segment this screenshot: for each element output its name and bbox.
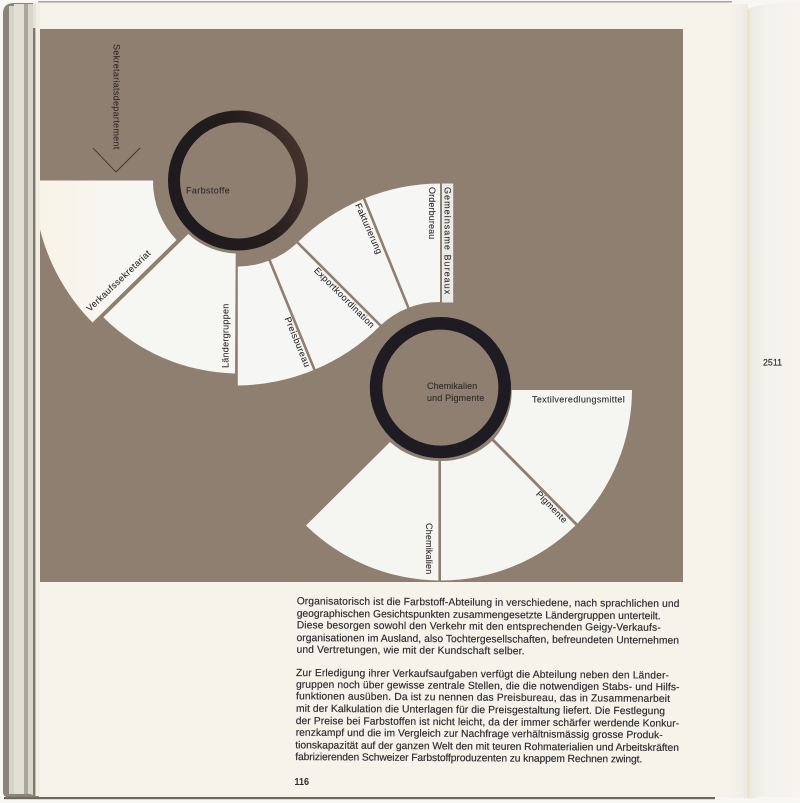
body text: first paragraph: Diese besorgen sowohl den Verkehr mit den entsprechenden Geigy-Verkaufs- (297, 620, 661, 634)
body text: second paragraph: renzkampf und die im Vergleich zur Nachfrage verhältnismässig grosse Produk- (296, 728, 663, 741)
page number: 2511: 2511 (763, 358, 782, 368)
diagram: Chemikalien und Pigmente wedges (306, 390, 632, 580)
body text: second paragraph (295, 668, 680, 765)
wedge group: Preisbureau, Exportkoordination, Fakturierung, Orderbureau (238, 184, 440, 386)
label: Preisbureau: Preisbureau (283, 315, 313, 369)
label: Farbstoffe: Farbstoffe (186, 186, 230, 196)
bottom page edge (4, 797, 715, 799)
wedge: Pigmente (441, 441, 576, 580)
divider: Preisbureau and Exportkoordination (270, 260, 315, 371)
vertical label and arrow: Sekretariatsdepartement (93, 44, 140, 172)
label: Fakturierung: Fakturierung (353, 202, 385, 256)
page number: 116: 116 (294, 776, 309, 788)
body text: second paragraph: gruppen noch über gewisse zentrale Stellen, die die notwendigen Stabs- und Hilfs- (296, 680, 680, 693)
gutter shading (728, 4, 748, 798)
body text: first paragraph: und Vertretungen, wie mit der Kundschaft selber. (296, 645, 525, 657)
wedge: Verkaufssekretariat (40, 180, 176, 322)
label: Exportkoordination: Exportkoordination (312, 265, 377, 330)
label: Ländergruppen: Ländergruppen (220, 303, 230, 368)
brown chart panel (40, 29, 683, 582)
label: Chemikalien: Chemikalien (424, 523, 434, 575)
label: und Pigmente line two: und Pigmente (427, 393, 485, 403)
label: Orderbureau: Orderbureau (427, 187, 437, 240)
divider: Fakturierung and Orderbureau (363, 196, 408, 308)
ring: Farbstoffe (174, 116, 302, 244)
label: Gemeinsame Bureaux: Gemeinsame Bureaux (442, 187, 452, 295)
label: Sekretariatsdepartement: Sekretariatsdepartement (112, 44, 122, 150)
body text: second paragraph: mit der Kalkulation die Unterlagen für die Preisgestaltung liefert. Die Festlegung (296, 704, 665, 717)
diagram: Farbstoffe wedges (40, 180, 453, 386)
page stack on the left edge (3, 3, 40, 797)
body text: first paragraph: Organisatorisch ist die Farbstoff-Abteilung in verschiedene, nach sprachlichen und (297, 596, 680, 610)
body text: first paragraph: geographischen Gesichtspunkten zusammengesetzte Ländergruppen unterteilt. (297, 609, 661, 622)
arrow: chevron down (93, 148, 140, 172)
label: Textilveredlungsmittel: Textilveredlungsmittel (532, 394, 626, 404)
label: Pigmente: Pigmente (534, 489, 570, 525)
bar: Gemeinsame Bureaux (442, 184, 453, 302)
wedge and ring labels (84, 186, 626, 575)
body text: first paragraph: organisationen im Ausland, also Tochtergesellschaften, befreundeten Unternehmen (296, 633, 679, 647)
top page edge (38, 1, 732, 3)
label: Chemikalien und Pigmente: Chemikalien (427, 381, 478, 391)
ring: Chemikalien und Pigmente (376, 323, 505, 452)
body text: second paragraph: fabrizierenden Schweizer Farbstoffproduzenten zu knappem Rechnen zwingt. (295, 752, 642, 765)
body text: second paragraph: der Preise bei Farbstoffen ist nicht leicht, da der immer schärfer werdende Konkur- (296, 716, 679, 730)
divider: Exportkoordination and Fakturierung (297, 242, 381, 326)
wedge: Chemikalien (306, 442, 438, 580)
book spine fold line (748, 9, 749, 798)
body text: first paragraph (296, 596, 680, 657)
wedge: Textilveredlungsmittel (494, 390, 632, 524)
body text: second paragraph: funktionen ausüben. Da ist zu nennen das Preisbureau, das in Zusammenarbeit (296, 691, 670, 705)
body text: second paragraph: Zur Erledigung ihrer Verkaufsaufgaben verfügt die Abteilung neben den Länder- (296, 668, 669, 682)
body text: second paragraph: tionskapazität auf der ganzen Welt den mit teuren Rohmaterialien und Arbeitskräften (295, 740, 679, 754)
label: Verkaufssekretariat: Verkaufssekretariat (84, 248, 153, 313)
right page (748, 2, 800, 799)
wedge: Ländergruppen (103, 234, 236, 374)
